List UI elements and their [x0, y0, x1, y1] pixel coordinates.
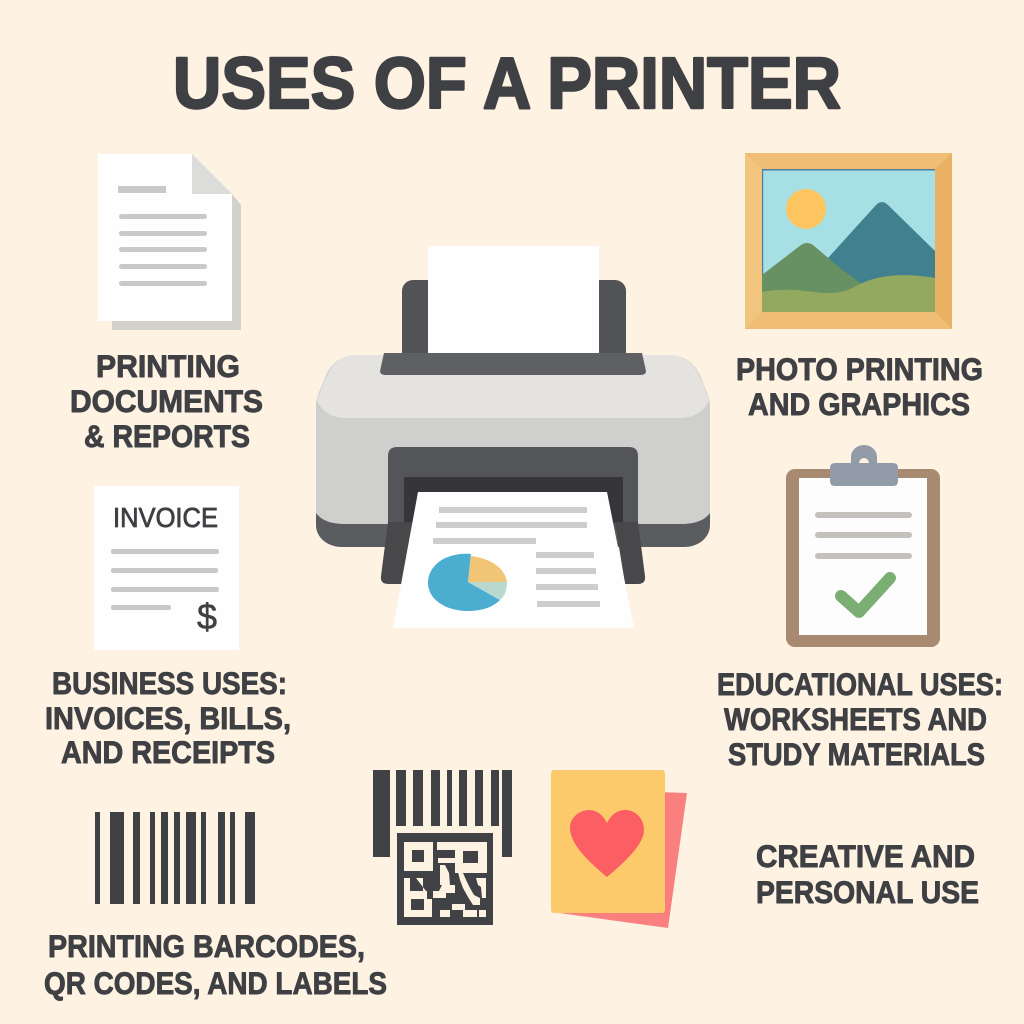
printer body: [316, 355, 710, 524]
hills: [762, 275, 935, 312]
output slot opening: [404, 477, 623, 523]
label: business uses: BUSINESS USES:: [52, 665, 287, 701]
label: business uses: AND RECEIPTS: [61, 734, 275, 770]
icon: barcode: [95, 812, 255, 904]
paper in feed tray: [428, 246, 599, 354]
label: printing documents: DOCUMENTS: [70, 383, 263, 419]
page text lines: [433, 507, 600, 607]
label: printing documents: & REPORTS: [84, 418, 250, 454]
printer base: [316, 495, 710, 547]
document lines: [118, 186, 207, 286]
icon: clipboard: [786, 445, 940, 647]
heart: [570, 810, 644, 877]
label: educational uses: [717, 666, 1003, 772]
mountains: [828, 202, 935, 300]
label: creative use: [756, 838, 979, 910]
pie chart: [428, 554, 507, 611]
label: barcodes: PRINTING BARCODES,: [48, 928, 365, 964]
rear paper support: [402, 280, 626, 354]
label: creative use: PERSONAL USE: [756, 874, 979, 910]
icon: greeting cards with heart: [551, 770, 687, 928]
label: educational uses: WORKSHEETS AND: [724, 701, 987, 737]
icon: document: [98, 154, 241, 330]
label: photo printing: PHOTO PRINTING: [736, 351, 983, 387]
icon: barcode and QR code: [373, 770, 512, 925]
paper slot bar: [380, 353, 646, 375]
label: business uses: [45, 665, 291, 770]
output slot housing: [388, 447, 638, 530]
label: photo printing: [736, 351, 983, 422]
title: USES OF A PRINTER: [173, 44, 841, 124]
icon: printer: [316, 246, 710, 628]
label: printing documents: [70, 348, 263, 454]
QR code: [397, 833, 493, 925]
printer top lid: [317, 355, 709, 418]
printed page: [393, 492, 634, 628]
check mark: [841, 578, 890, 612]
label: creative use: CREATIVE AND: [756, 838, 975, 874]
label: photo printing: AND GRAPHICS: [748, 386, 970, 422]
output tray: [381, 522, 645, 584]
label: barcodes: [44, 928, 387, 1001]
label: business uses: INVOICES, BILLS,: [45, 700, 291, 736]
sun: [786, 189, 826, 229]
label: educational uses: STUDY MATERIALS: [728, 736, 985, 772]
barcode bars: [373, 770, 512, 857]
icon: invoice: [94, 486, 239, 650]
clipboard lines: [815, 512, 912, 559]
invoice lines: [111, 549, 219, 610]
label: barcodes: QR CODES, AND LABELS: [44, 965, 387, 1001]
icon: invoice: $: [197, 596, 217, 637]
icon: photo frame: [745, 153, 952, 329]
icon: invoice: INVOICE: [113, 502, 218, 533]
label: printing documents: PRINTING: [96, 348, 240, 384]
clip: [830, 445, 898, 486]
